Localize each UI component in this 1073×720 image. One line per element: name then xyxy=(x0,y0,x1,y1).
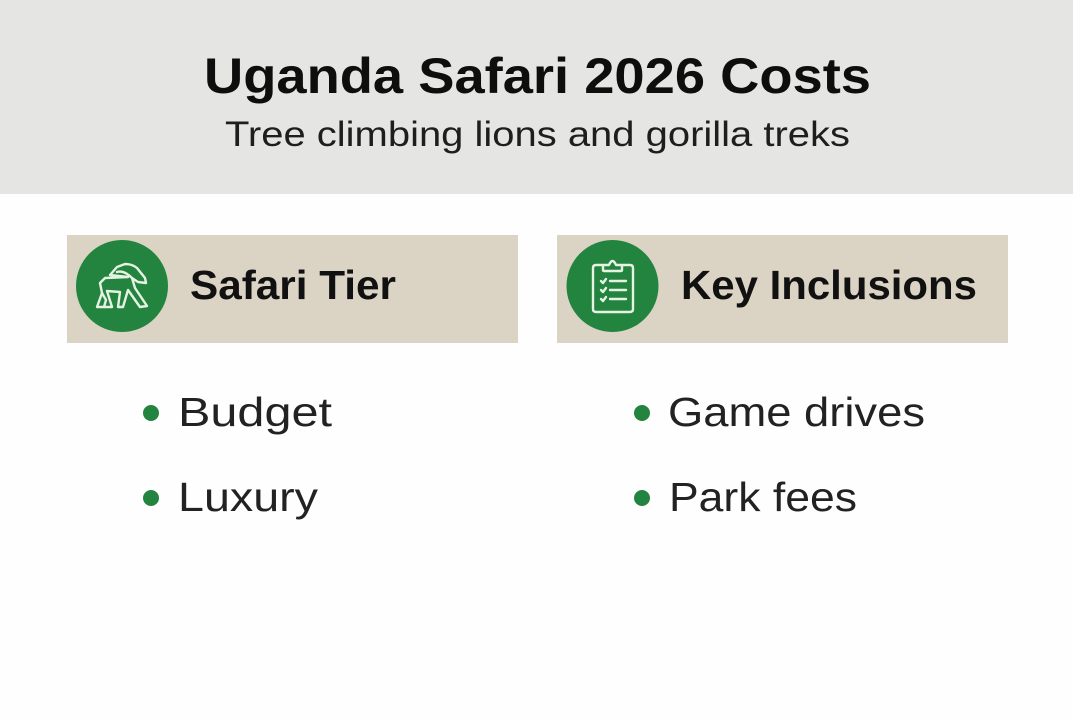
bullet: Luxury: Luxury xyxy=(178,474,319,520)
panel: safari tier header xyxy=(67,235,518,343)
heading: Safari Tier xyxy=(190,262,396,308)
bullet: Game drives: Game drives xyxy=(668,389,925,435)
icon: clipboard checklist xyxy=(566,240,658,332)
title: Uganda Safari 2026 Costs xyxy=(204,48,871,104)
bullet: Budget xyxy=(143,389,333,435)
panel: key inclusions header xyxy=(557,235,1008,343)
bullet: Park fees: Park fees xyxy=(669,474,857,520)
header band xyxy=(0,0,1073,194)
heading: Key Inclusions xyxy=(681,262,977,308)
icon: gorilla xyxy=(76,240,168,332)
bullet: Budget: Budget xyxy=(178,389,333,435)
list: key inclusions xyxy=(634,389,925,520)
list: safari tiers xyxy=(143,389,333,520)
subtitle: Tree climbing lions and gorilla treks xyxy=(225,115,850,154)
